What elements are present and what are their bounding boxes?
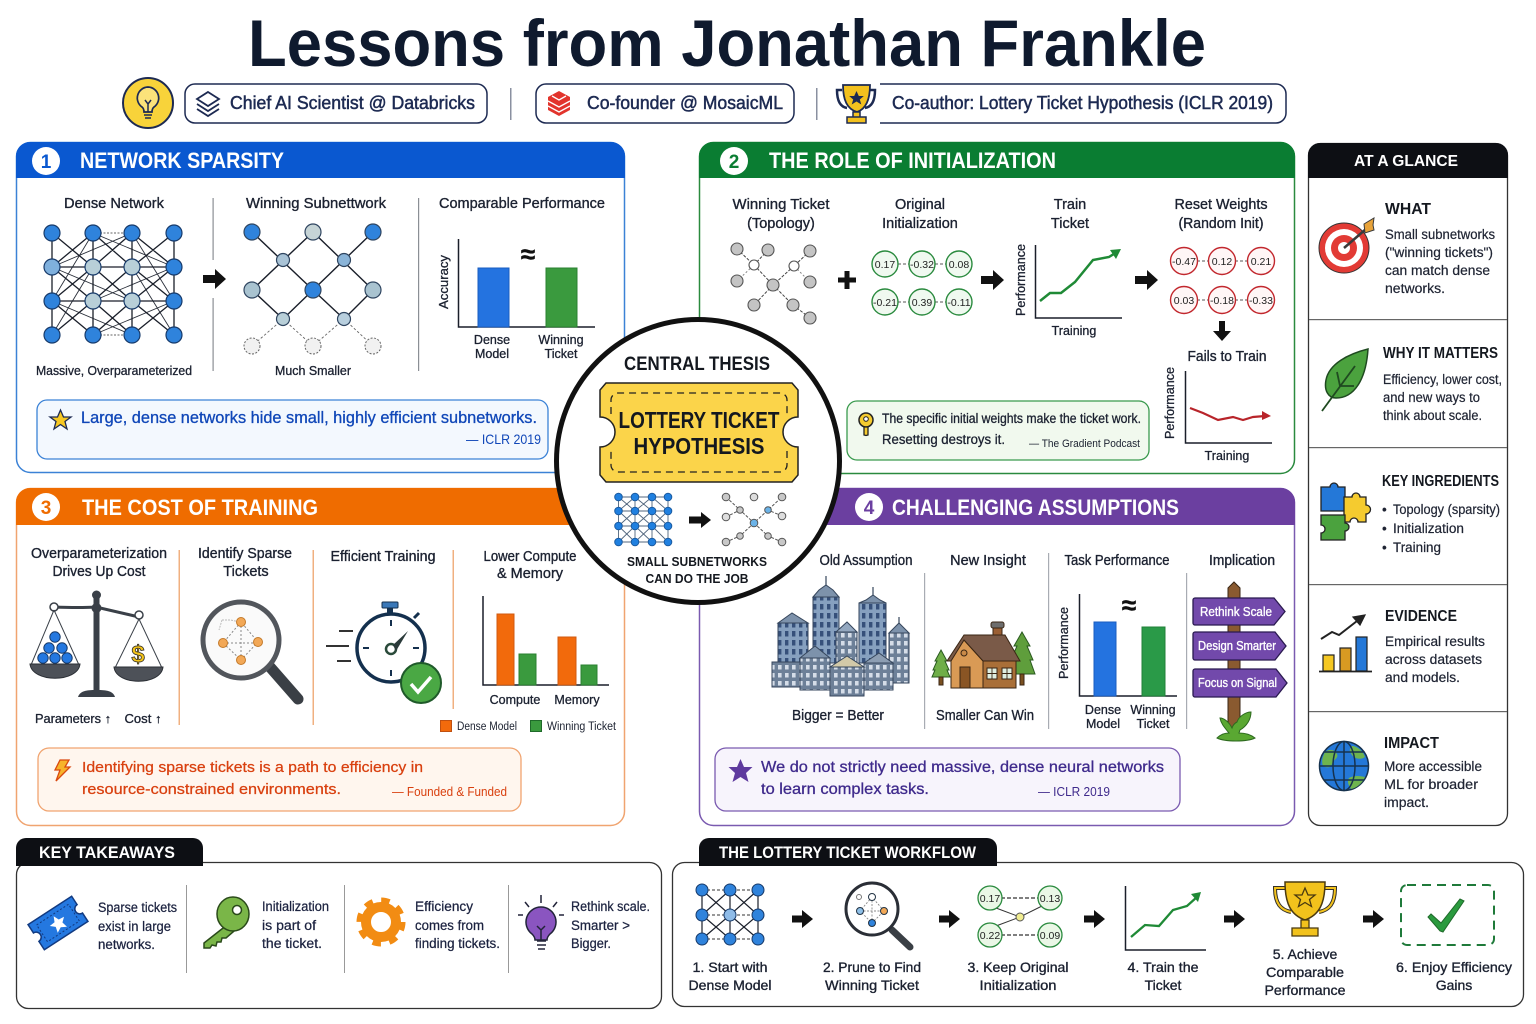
takeaway: initialization: is part of (262, 918, 316, 933)
panel: challenging assumptions (699, 488, 1295, 826)
step 3: keep initialization: 3. Keep Original (968, 959, 1068, 975)
arrow (1084, 910, 1105, 928)
section: impact: ML for broader (1384, 777, 1479, 792)
callout: training quote: — Founded & Funded (392, 785, 507, 799)
icon: magnifier with network (203, 602, 298, 699)
section: what: Small subnetworks (1385, 227, 1495, 242)
arrow (792, 910, 813, 928)
takeaway: efficiency: finding tickets. (415, 936, 500, 951)
heading: winning ticket topology: Winning Ticket (732, 197, 830, 213)
caption: small subnetworks (627, 554, 767, 586)
legend: Dense Model (457, 721, 517, 733)
heading: reset weights: (Random Init) (1178, 216, 1264, 232)
takeaway: efficiency: Efficiency (415, 899, 473, 914)
caption: parameters and cost (35, 712, 162, 726)
bar chart: task performance (1057, 590, 1177, 731)
section: why it matters: and new ways to (1383, 390, 1480, 405)
heading: original initialization: Original (895, 197, 945, 213)
caption: parameters and cost: Cost ↑ (124, 712, 162, 726)
callout: assumptions quote: We do not strictly need massive, dense neural networks (761, 759, 1164, 776)
lottery ticket badge (600, 383, 798, 482)
heading: original initialization: Initialization (882, 216, 958, 232)
callout: training quote: resource-constrained environments. (82, 781, 341, 798)
line chart: failed training (1163, 367, 1272, 463)
heading: task performance: Task Performance (1064, 553, 1170, 569)
heading: train ticket: Train (1054, 197, 1086, 213)
original weights grid (872, 251, 972, 315)
panel 2 header: 2 (729, 152, 739, 173)
icon: stopwatch (326, 602, 441, 703)
original weights grid: -0.32 (910, 259, 934, 271)
icon: green key (204, 897, 249, 948)
section: impact (1320, 735, 1482, 810)
takeaway: initialization: Initialization (262, 899, 329, 914)
panel 1 header: 1 (41, 152, 52, 173)
icon: lightning bolt (55, 760, 70, 781)
heading: fails to train: Fails to Train (1188, 349, 1266, 365)
callout: assumptions quote (715, 748, 1180, 811)
heading: new insight: New Insight (950, 553, 1026, 569)
step 1: dense model (688, 884, 772, 993)
callout: training quote (38, 748, 521, 811)
bar chart: compute and memory: Compute (490, 693, 540, 707)
heading: overparameterization: Drives Up Cost (52, 564, 146, 580)
reset weights grid: 0.03 (1174, 295, 1194, 307)
pill: Lottery Ticket co-author (880, 84, 1286, 123)
reset weights grid: -0.33 (1249, 295, 1273, 307)
caption: small subnetworks: SMALL SUBNETWORKS (627, 554, 767, 569)
reset weights grid (1170, 248, 1274, 314)
icon: rising bar chart (1319, 615, 1372, 672)
takeaway: initialization: the ticket. (262, 936, 322, 951)
section: why it matters: Efficiency, lower cost, (1383, 372, 1502, 387)
takeaway: sparse tickets (28, 896, 177, 952)
heading: comparable performance: Comparable Performance (439, 196, 605, 212)
header credentials row (123, 78, 1286, 128)
heading: train ticket: Ticket (1051, 216, 1089, 232)
mini sparse network (722, 493, 786, 546)
icon: plus (838, 271, 856, 289)
step 1: dense model: Dense Model (688, 977, 772, 993)
bar chart: compute and memory: Memory (554, 693, 600, 707)
heading: overparameterization: Overparameterization (31, 546, 167, 562)
mini dense network (615, 493, 672, 546)
legend: Winning Ticket (547, 721, 617, 733)
section: why it matters: think about scale. (1383, 408, 1482, 423)
section: evidence: across datasets (1385, 652, 1482, 667)
panel: network sparsity (16, 142, 625, 472)
panel 1 header (16, 142, 625, 178)
section: key ingredients: KEY INGREDIENTS (1382, 473, 1499, 490)
heading: reset weights: Reset Weights (1174, 197, 1268, 213)
section: why it matters: WHY IT MATTERS (1383, 345, 1498, 362)
takeaway: rethink scale: Smarter > (571, 918, 630, 933)
original weights grid: 0.17 (875, 259, 895, 271)
pill: Lottery Ticket co-author: Co-author: Lottery Ticket Hypothesis (ICLR 2019) (892, 93, 1273, 113)
section: key ingredients: Initialization (1393, 521, 1464, 536)
original weights grid: 0.08 (949, 259, 969, 271)
section: evidence: Empirical results (1385, 634, 1485, 649)
bar chart: accuracy: Model (475, 347, 509, 361)
heading: overparameterization (31, 546, 167, 580)
bar chart: task performance: Winning (1130, 703, 1176, 717)
heading: train ticket (1051, 197, 1089, 232)
heading: winning ticket topology: (Topology) (747, 216, 815, 232)
caption: smaller can win: Smaller Can Win (936, 708, 1034, 724)
panel: cost of training (16, 488, 625, 826)
icon: globe (1320, 742, 1368, 790)
bar chart: accuracy: Accuracy (437, 254, 451, 309)
bar chart: accuracy: Dense (474, 333, 510, 347)
heading: efficient training: Efficient Training (330, 549, 436, 565)
panel 2 header: THE ROLE OF INITIALIZATION (769, 148, 1056, 173)
icon: key (859, 413, 873, 436)
icon: signpost: Focus on Signal (1198, 676, 1277, 690)
pill: MosaicML: Co-founder @ MosaicML (587, 93, 783, 113)
section: key ingredients: Training (1393, 540, 1441, 555)
icon: target (1319, 218, 1374, 273)
arrow (1363, 910, 1384, 928)
line chart: train ticket (1014, 244, 1122, 338)
takeaway: sparse tickets: networks. (98, 937, 155, 952)
takeaway: rethink scale: Rethink scale. (571, 899, 650, 914)
chart: winning subnetwork diagram (244, 224, 381, 354)
reset weights grid: -0.47 (1172, 256, 1196, 268)
heading: identify sparse tickets (198, 546, 292, 580)
step 3: keep initialization: 0.13 (1040, 893, 1060, 905)
callout: initialization quote: The specific initial weights make the ticket work. (882, 411, 1141, 426)
pill: Databricks (185, 84, 487, 123)
icon: gear (360, 901, 402, 943)
heading: winning subnetwork: Winning Subnettwork (246, 196, 387, 212)
step 2: prune: 2. Prune to Find (823, 959, 921, 975)
step 3: keep initialization: 0.22 (980, 930, 1000, 942)
heading: central thesis: CENTRAL THESIS (624, 354, 770, 375)
section: impact: More accessible (1384, 759, 1482, 774)
icon: balance scale (30, 590, 163, 697)
bar chart: task performance: Ticket (1137, 717, 1170, 731)
takeaway: efficiency (360, 899, 500, 951)
takeaway: rethink scale (518, 895, 650, 951)
takeaway: sparse tickets: exist in large (98, 919, 171, 934)
icon: small house and trees (932, 622, 1035, 688)
heading: reset weights (1174, 197, 1268, 232)
step 5: comparable performance: Comparable (1266, 964, 1344, 980)
panel: role of initialization (699, 142, 1295, 474)
icon: puzzle pieces (1321, 483, 1371, 540)
central thesis circle (556, 320, 840, 602)
icon: signpost: Rethink Scale (1200, 605, 1272, 619)
heading: implication: Implication (1209, 553, 1275, 569)
step 5: comparable performance: Performance (1264, 982, 1346, 998)
arrow (939, 910, 960, 928)
step 3: keep initialization: 0.09 (1040, 930, 1060, 942)
step 5: comparable performance (1264, 882, 1346, 998)
bar chart: compute and memory (483, 596, 609, 707)
heading: lower compute and memory (484, 549, 576, 582)
at a glance header: AT A GLANCE (1354, 153, 1458, 170)
key takeaways tab: KEY TAKEAWAYS (39, 843, 175, 862)
panel 4 header: CHALLENGING ASSUMPTIONS (892, 495, 1179, 520)
panel 1 header: NETWORK SPARSITY (80, 148, 284, 173)
step 3: keep initialization (968, 886, 1068, 993)
legend (440, 720, 617, 733)
icon: header trophy (837, 85, 875, 123)
bar chart: accuracy: ≈ (521, 239, 535, 269)
panel 2 header (699, 142, 1295, 178)
section: key ingredients: • (1382, 540, 1387, 555)
panel 4 header: 4 (864, 498, 875, 519)
takeaway: efficiency: comes from (415, 918, 484, 933)
section: why it matters (1322, 345, 1502, 423)
panel 3 header (16, 488, 625, 525)
icon: balance scale: $ (131, 641, 145, 668)
panel 4 header (699, 488, 1295, 525)
heading: identify sparse tickets: Tickets (223, 564, 269, 580)
bar chart: accuracy: Ticket (545, 347, 578, 361)
step 4: train (1126, 886, 1206, 993)
line chart: train ticket: Performance (1014, 244, 1028, 316)
callout: initialization quote (847, 401, 1149, 460)
section: what (1319, 201, 1495, 296)
callout: network sparsity quote (37, 400, 548, 459)
at a glance header (1308, 143, 1508, 178)
arrow (1224, 910, 1245, 928)
icon: leaf (1322, 349, 1368, 411)
section: what: ("winning tickets") (1385, 245, 1493, 260)
callout: network sparsity quote: — ICLR 2019 (466, 431, 541, 447)
line chart: failed training: Training (1205, 449, 1249, 463)
arrow: dense to winning (203, 269, 226, 289)
section: impact: impact. (1384, 795, 1429, 810)
workflow tab: THE LOTTERY TICKET WORKFLOW (719, 843, 977, 862)
lottery ticket badge: LOTTERY TICKET (618, 407, 780, 433)
bar chart: accuracy (437, 239, 595, 361)
original weights grid: -0.21 (873, 297, 897, 309)
caption: bigger is better: Bigger = Better (792, 708, 884, 724)
caption: small subnetworks: CAN DO THE JOB (646, 571, 748, 586)
icon: star (50, 410, 71, 429)
icon: signpost (1193, 582, 1287, 741)
caption: parameters and cost: Parameters ↑ (35, 712, 111, 726)
step 6: efficiency gains (1396, 885, 1512, 993)
reset weights grid: -0.18 (1210, 295, 1234, 307)
pill: MosaicML (536, 84, 794, 123)
panel: key takeaways (16, 838, 662, 1008)
heading: identify sparse tickets: Identify Sparse (198, 546, 292, 562)
icon: purple bulb (518, 895, 564, 949)
heading: dense network: Dense Network (64, 196, 165, 212)
caption: much smaller: Much Smaller (275, 364, 351, 378)
step 5: comparable performance: 5. Achieve (1273, 946, 1338, 962)
section: evidence: EVIDENCE (1385, 608, 1457, 625)
step 4: train: Ticket (1145, 977, 1182, 993)
line chart: failed training: Performance (1163, 367, 1177, 439)
bar chart: task performance: Dense (1085, 703, 1121, 717)
arrow: train to reset (1135, 270, 1158, 290)
bar chart: accuracy: Winning (538, 333, 584, 347)
step 1: dense model: 1. Start with (692, 959, 768, 975)
arrow: init to train (981, 270, 1004, 290)
key takeaways tab (16, 838, 203, 866)
reset weights grid: 0.21 (1251, 256, 1271, 268)
line chart: train ticket: Training (1052, 324, 1096, 338)
callout: initialization quote: — The Gradient Podcast (1029, 438, 1140, 450)
step 6: efficiency gains: Gains (1436, 977, 1472, 993)
bar chart: task performance: Performance (1057, 607, 1071, 679)
callout: training quote: Identifying sparse tickets is a path to efficiency in (82, 759, 423, 776)
icon: blue ticket (28, 896, 88, 950)
arrow: reset down (1213, 321, 1231, 341)
section: what: networks. (1385, 281, 1445, 296)
icon: purple star (728, 759, 752, 782)
panel: lottery ticket workflow (672, 838, 1524, 1006)
section: what: can match dense (1385, 263, 1490, 278)
caption: massive: Massive, Overparameterized (36, 364, 192, 378)
section: key ingredients: • (1382, 521, 1387, 536)
callout: assumptions quote: — ICLR 2019 (1038, 784, 1110, 799)
icon: city skyline (772, 576, 909, 696)
panel: at a glance (1308, 143, 1508, 826)
bar chart: task performance: Model (1086, 717, 1120, 731)
callout: network sparsity quote: Large, dense networks hide small, highly efficient subnetworks. (81, 409, 537, 427)
reset weights grid: 0.12 (1212, 256, 1232, 268)
panel 3 header: 3 (41, 498, 51, 519)
section: evidence (1319, 608, 1485, 685)
heading: winning ticket topology (732, 197, 830, 232)
arrow: dense to small (689, 512, 711, 528)
callout: initialization quote: Resetting destroys it. (882, 432, 1005, 447)
section: key ingredients: Topology (sparsity) (1393, 502, 1500, 517)
original weights grid: -0.11 (947, 297, 971, 309)
chart: dense network diagram (44, 225, 182, 343)
workflow tab (699, 838, 997, 866)
section: key ingredients (1321, 473, 1500, 555)
original weights grid: 0.39 (912, 297, 932, 309)
takeaway: initialization (204, 897, 329, 951)
title: Lessons from Jonathan Frankle (248, 6, 1206, 80)
step 4: train: 4. Train the (1128, 959, 1199, 975)
section: what: WHAT (1385, 201, 1432, 218)
section: evidence: and models. (1385, 670, 1460, 685)
step 6: efficiency gains: 6. Enjoy Efficiency (1396, 959, 1512, 975)
step 3: keep initialization: 0.17 (980, 893, 1000, 905)
section: key ingredients: • (1382, 502, 1387, 517)
takeaway: rethink scale: Bigger. (571, 936, 611, 951)
heading: old assumption: Old Assumption (820, 553, 912, 569)
step 2: prune (823, 883, 921, 993)
takeaway: sparse tickets: Sparse tickets (98, 900, 177, 915)
icon: signpost: Design Smarter (1198, 639, 1276, 653)
heading: lower compute and memory: Lower Compute (484, 549, 576, 565)
heading: lower compute and memory: & Memory (497, 566, 564, 582)
bar chart: task performance: ≈ (1122, 590, 1136, 620)
icon: light bulb badge (123, 78, 173, 128)
callout: assumptions quote: to learn complex tasks. (761, 781, 929, 798)
step 3: keep initialization: Initialization (980, 977, 1056, 993)
heading: original initialization (882, 197, 958, 232)
pill: Databricks: Chief AI Scientist @ Databricks (230, 93, 475, 113)
step 2: prune: Winning Ticket (825, 977, 919, 993)
section: impact: IMPACT (1384, 735, 1439, 752)
chart: topology (731, 243, 816, 324)
lottery ticket badge: HYPOTHESIS (634, 433, 764, 459)
panel 3 header: THE COST OF TRAINING (82, 495, 318, 520)
